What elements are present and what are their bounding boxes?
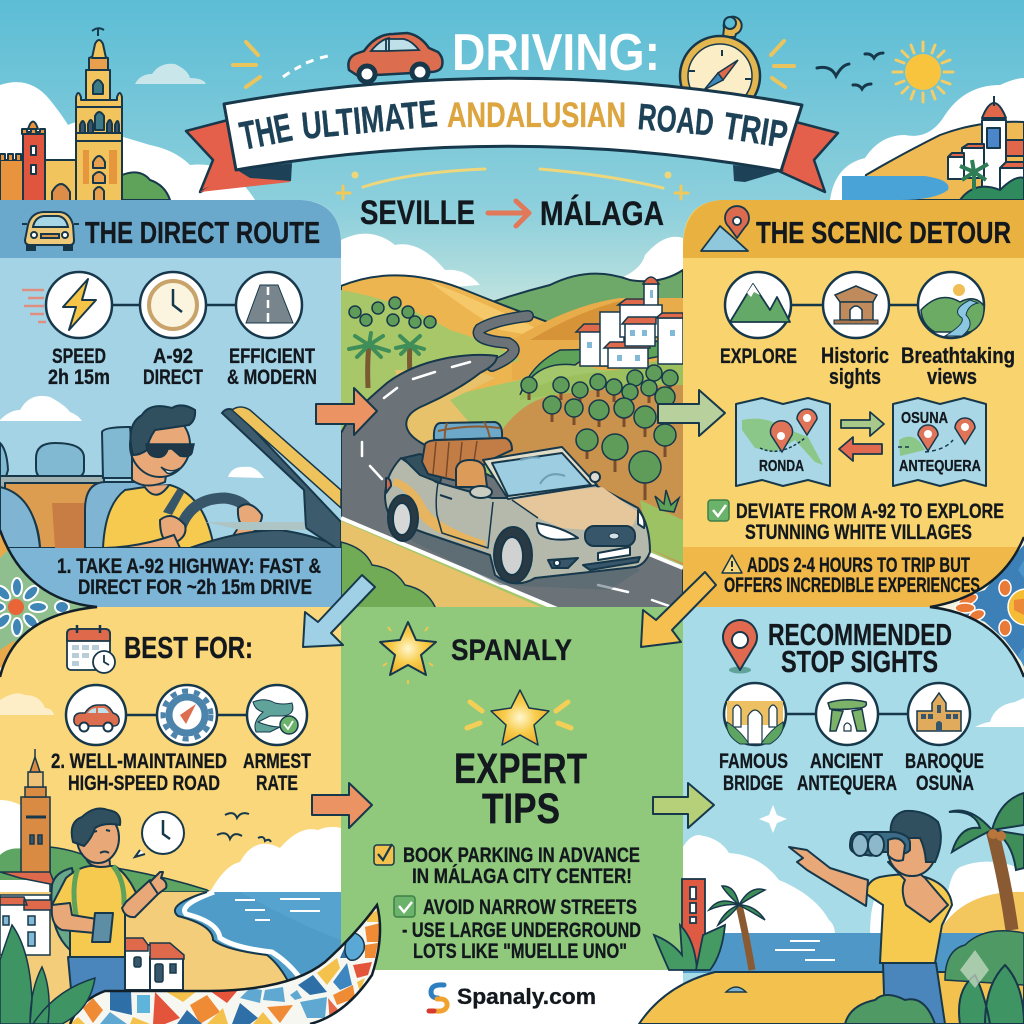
road upper bend [479, 316, 528, 366]
expert tips heading [454, 745, 587, 833]
banner title text: ULTIMATE [300, 93, 439, 148]
scenic labels: Historic [821, 343, 889, 368]
panel: spanaly expert tips [341, 607, 683, 970]
left mosaic outline [0, 530, 97, 677]
footer [300, 970, 720, 1024]
banner title text: TRIP [721, 105, 790, 157]
recommended heading [768, 617, 952, 679]
recommended labels: FAMOUS [719, 750, 788, 773]
tip: avoid narrow streets: AVOID NARROW STREETS [423, 896, 637, 919]
warning note [722, 554, 980, 597]
direct route labels [48, 345, 317, 389]
tip: avoid narrow streets [394, 896, 641, 963]
direct route note: 1. TAKE A-92 HIGHWAY: FAST & [57, 555, 321, 578]
icon: expert star [467, 690, 571, 745]
recommended labels: BRIDGE [723, 772, 783, 795]
left skyline: Seville cathedral and Giralda [0, 28, 170, 202]
icon: spanaly logo [429, 985, 447, 1011]
map: Ronda: RONDA [759, 458, 804, 475]
banner title text: ROAD [636, 96, 716, 144]
mosaic between left panels [0, 534, 87, 672]
brand heading: SPANALY [451, 634, 572, 667]
tip: book parking: BOOK PARKING IN ADVANCE [403, 844, 640, 867]
scenic warning strip [683, 547, 1024, 607]
map: Osuna and Antequera: OSUNA [901, 410, 948, 427]
scenic header [683, 200, 1024, 258]
palms [349, 333, 424, 388]
arrow: direct route into road [316, 388, 377, 435]
direct route note: DIRECT FOR ~2h 15m DRIVE [78, 576, 312, 599]
best for heading: BEST FOR: [124, 630, 253, 665]
direct route labels: EFFICIENT [229, 345, 315, 368]
icon: calendar [67, 625, 115, 673]
mosaic outline [70, 905, 380, 1024]
panel: best for [0, 607, 341, 1024]
compass [680, 17, 760, 116]
icon: brand star [380, 622, 436, 684]
roadside sand and bush [341, 521, 540, 607]
footer website: Spanaly.com [457, 984, 596, 1009]
tip: avoid narrow streets: LOTS LIKE "MUELLE UNO" [413, 940, 627, 963]
banner title text: ANDALUSIAN [447, 96, 626, 135]
arrow: direct route to best for [303, 575, 375, 647]
recommended labels: BAROQUE [905, 750, 984, 773]
right mosaic outline [930, 537, 1024, 677]
sky background [0, 0, 1024, 330]
driver illustration [0, 396, 341, 548]
sun [893, 42, 953, 102]
route heading: Seville to Málaga [360, 194, 664, 233]
direct route labels: DIRECT [143, 366, 203, 389]
icon row: mountains, monument, valley [725, 272, 984, 338]
tip: book parking: IN MÁLAGA CITY CENTER! [412, 865, 632, 888]
convertible car with luggage [385, 422, 650, 590]
beach scene with traveller [0, 693, 341, 1000]
icon row: bridge, dolmen, palace [724, 683, 970, 745]
swooshes and sparkles [337, 169, 688, 199]
white village [576, 277, 683, 368]
tip: avoid narrow streets: - USE LARGE UNDERGROUND [402, 919, 641, 942]
olive grove on the left hill [349, 297, 436, 328]
best for labels [51, 750, 311, 795]
recommended heading: RECOMMENDED [768, 617, 952, 652]
icon row: speed, clock, road [22, 272, 302, 338]
direct route labels: & MODERN [227, 366, 317, 389]
recommended labels: OSUNA [916, 772, 974, 795]
map: Osuna and Antequera: ANTEQUERA [899, 458, 981, 475]
coastal scene with binocular man [639, 698, 1024, 1024]
direct route note [57, 555, 321, 599]
road markings [341, 518, 683, 611]
top red car [233, 33, 442, 87]
right skyline: coastal white village [842, 96, 1024, 200]
recommended labels: ANTEQUERA [797, 772, 897, 795]
compass rays [771, 41, 794, 87]
best for labels: RATE [256, 772, 298, 795]
title: Driving: DRIVING: [452, 24, 660, 82]
icon: map pin [723, 620, 757, 674]
recommended labels [719, 750, 984, 795]
scenic labels: views [927, 364, 977, 389]
panel: the scenic detour [683, 200, 1024, 607]
expert tips heading: TIPS [482, 785, 560, 833]
icon: clock speech bubble [135, 812, 184, 857]
arrow: tips to recommended [653, 783, 714, 828]
panel: the direct route [0, 200, 341, 607]
direct route labels: SPEED [52, 345, 106, 368]
scenic labels [720, 343, 1015, 389]
gaudi mosaic serpent [70, 905, 380, 1024]
ribbon banner [186, 78, 838, 192]
direct route bottom strip [0, 548, 341, 607]
central landscape illustration [341, 270, 683, 612]
bushes [845, 995, 935, 1024]
route heading: Seville to Málaga: MÁLAGA [540, 195, 664, 233]
mosaic between right panels [938, 540, 1024, 674]
olive trunks [529, 380, 670, 500]
scenic labels: sights [829, 364, 881, 389]
scenic labels: EXPLORE [720, 345, 797, 368]
panel: recommended stop sights [639, 607, 1024, 1024]
map: Ronda [736, 398, 830, 486]
best for labels: ARMEST [243, 750, 311, 773]
icon row: car, gear, road [66, 685, 307, 745]
icon: mountain pin [701, 206, 749, 251]
direct route heading: THE DIRECT ROUTE [85, 215, 320, 250]
deviate note with check [708, 500, 1004, 544]
recommended heading: STOP SIGHTS [781, 644, 938, 679]
clouds in the sky [0, 64, 1024, 295]
icon: yellow car [22, 212, 79, 250]
road sand shoulder [395, 370, 494, 444]
tip: book parking [374, 844, 640, 888]
direct route labels: A-92 [153, 345, 193, 368]
man body [865, 874, 952, 963]
best for labels: 2. WELL-MAINTAINED [51, 750, 227, 773]
arrow: scenic detour to recommended [641, 572, 716, 647]
direct route header [0, 200, 341, 258]
arrow: road into scenic detour [658, 390, 725, 436]
map: Osuna and Antequera [893, 398, 986, 486]
direct route labels: 2h 15m [48, 366, 110, 389]
foreground palm leaves [0, 925, 95, 1024]
best for labels: HIGH-SPEED ROAD [68, 772, 220, 795]
banner title text: THE [236, 106, 296, 159]
expert tips heading: EXPERT [454, 745, 587, 793]
arrow: best for to tips [312, 783, 372, 828]
arrows between maps [839, 412, 884, 461]
mosaic tiles [70, 910, 380, 1024]
winding road [341, 355, 683, 612]
route heading: Seville to Málaga: SEVILLE [360, 194, 475, 232]
recommended labels: ANCIENT [810, 750, 883, 773]
birds [817, 53, 883, 89]
banner title text [236, 93, 790, 159]
olive grove on the right hill [521, 365, 678, 483]
